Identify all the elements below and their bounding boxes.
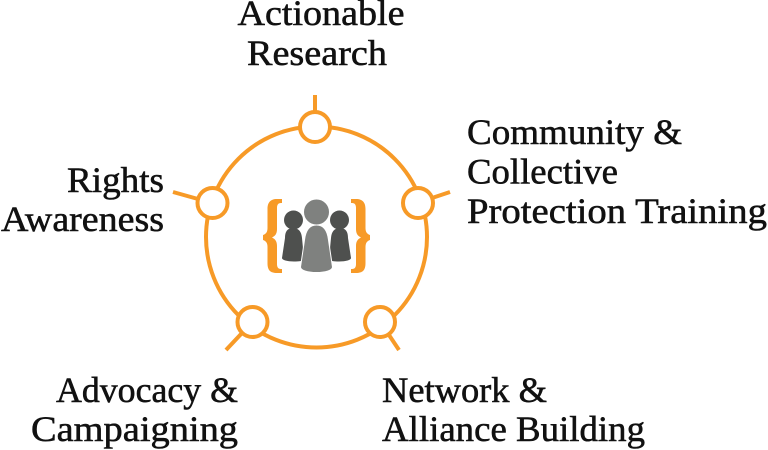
label: Rights Awareness: Rights <box>67 160 164 200</box>
node: right <box>403 188 450 218</box>
label: Rights Awareness: Awareness <box>1 199 164 239</box>
label: Community & Collective Protection Training <box>467 112 767 231</box>
right brace <box>351 199 370 273</box>
node: top <box>300 95 330 142</box>
node: bottom left <box>226 307 268 350</box>
node: left <box>173 188 228 218</box>
left figure <box>282 210 304 262</box>
label: Community & Collective Protection Training: Collective <box>467 152 618 192</box>
label: Advocacy & Campaigning <box>31 370 238 449</box>
left brace <box>263 199 282 273</box>
label: Network & Alliance Building <box>382 370 645 449</box>
label: Community & Collective Protection Training: Community & <box>467 112 682 152</box>
icon: people in braces <box>263 199 370 273</box>
label: Network & Alliance Building: Alliance Building <box>382 409 645 449</box>
ring connecting the nodes <box>206 126 427 348</box>
label: Rights Awareness <box>1 160 164 239</box>
right figure <box>329 210 351 262</box>
label: Community & Collective Protection Training: Protection Training <box>467 191 767 231</box>
centre figure <box>300 199 332 272</box>
node: bottom right <box>365 307 399 350</box>
label: Advocacy & Campaigning: Advocacy & <box>56 370 238 410</box>
label: Actionable Research <box>238 0 404 73</box>
label: Actionable Research: Research <box>247 33 387 73</box>
label: Advocacy & Campaigning: Campaigning <box>31 409 238 449</box>
label: Network & Alliance Building: Network & <box>382 370 547 410</box>
